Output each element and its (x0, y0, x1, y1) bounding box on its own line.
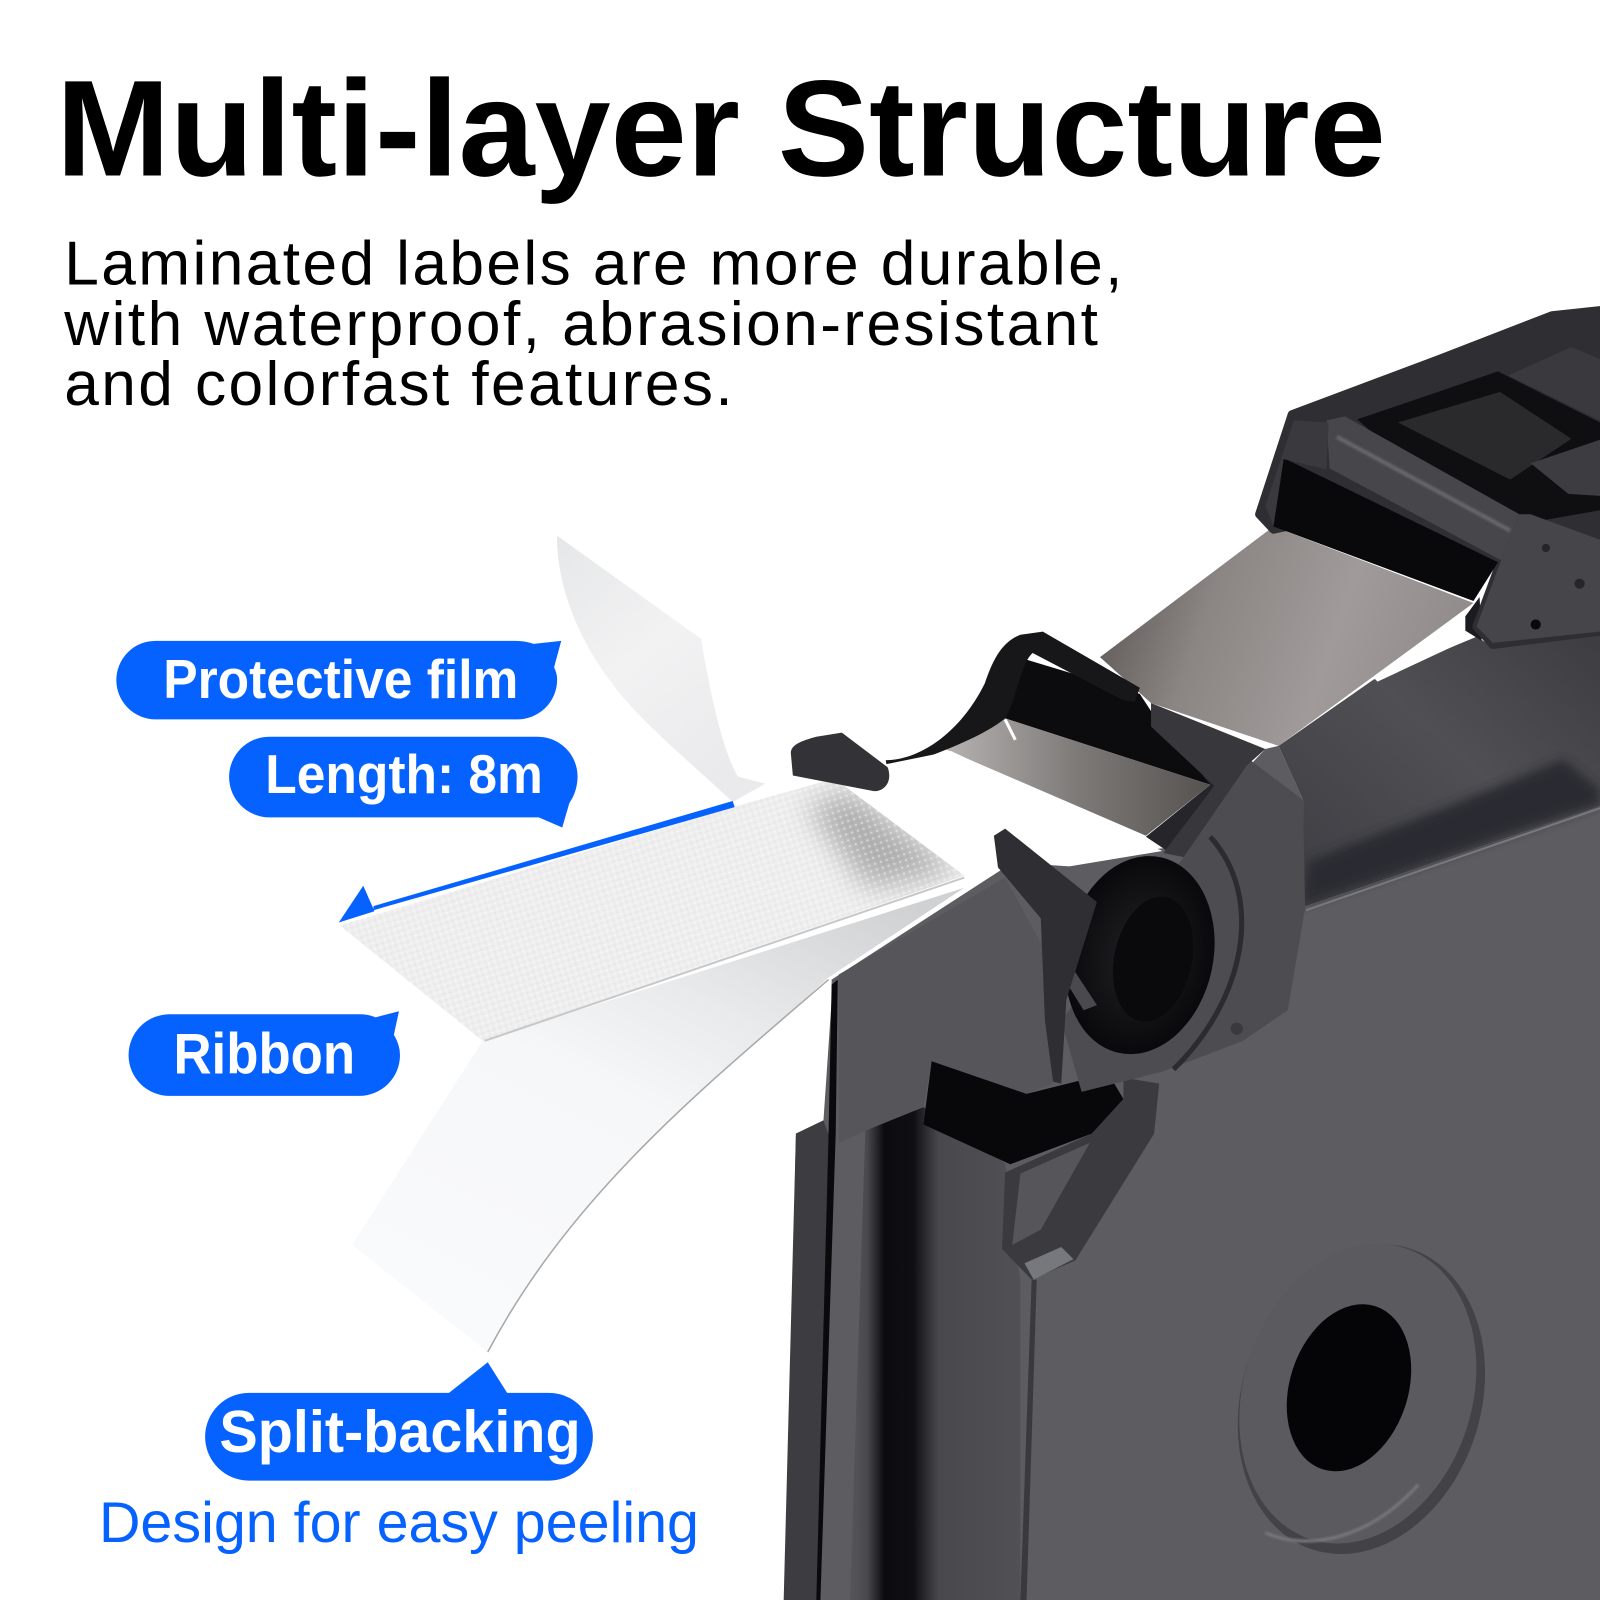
top wall (1259, 310, 1600, 645)
textured ribbon (340, 779, 964, 1041)
tape in channel (1100, 527, 1473, 746)
washer highlight (1265, 1485, 1418, 1541)
left top corner (1265, 420, 1329, 526)
subtitle text block: Laminated labels are more durable, (64, 230, 1122, 299)
white label strip (835, 751, 1162, 886)
cassette body (786, 746, 1600, 1600)
bubble: length: Length: 8m (265, 743, 543, 805)
opening (1047, 842, 1232, 1068)
bubble: ribbon (129, 1011, 400, 1096)
front block (839, 878, 1061, 1143)
bubble: protective film (116, 641, 561, 719)
caption: Design for easy peeling (99, 1491, 699, 1555)
title: Multi-layer Structure (56, 52, 1386, 205)
spool hole (1266, 1288, 1432, 1488)
window tab (1508, 347, 1600, 420)
top bar (1327, 416, 1519, 560)
bubble: split-backing: Split-backing (219, 1398, 581, 1465)
subtitle text block: and colorfast features. (64, 350, 733, 419)
window backing (1122, 714, 1243, 855)
bevel (1002, 1078, 1159, 1280)
left flange (784, 1120, 829, 1600)
bubble: ribbon: Ribbon (173, 1022, 355, 1086)
clear film window (945, 718, 1210, 836)
second bracket (1151, 703, 1265, 857)
washer ring (1199, 1212, 1524, 1586)
arrow: length (339, 801, 735, 922)
bracket interior (1005, 658, 1210, 785)
clip left (791, 733, 889, 791)
right hinge (1477, 514, 1600, 643)
dark ring round opening (1061, 759, 1305, 1092)
bubble: split-backing (205, 1362, 593, 1481)
subtitle text block (63, 230, 1122, 419)
clip front (994, 829, 1097, 1084)
notch (923, 1061, 1123, 1164)
bubble: protective film: Protective film (163, 648, 518, 710)
label cassette (784, 310, 1600, 1600)
protective film (557, 536, 765, 802)
channel shadow (1273, 458, 1498, 601)
arched bracket (886, 632, 1140, 771)
top window (1357, 371, 1600, 531)
subtitle text block: with waterproof, abrasion-resistant (63, 290, 1098, 359)
split backing (352, 888, 964, 1352)
vertical rib (850, 1107, 1020, 1600)
bubble: length (229, 737, 578, 828)
upper face (1279, 622, 1600, 907)
